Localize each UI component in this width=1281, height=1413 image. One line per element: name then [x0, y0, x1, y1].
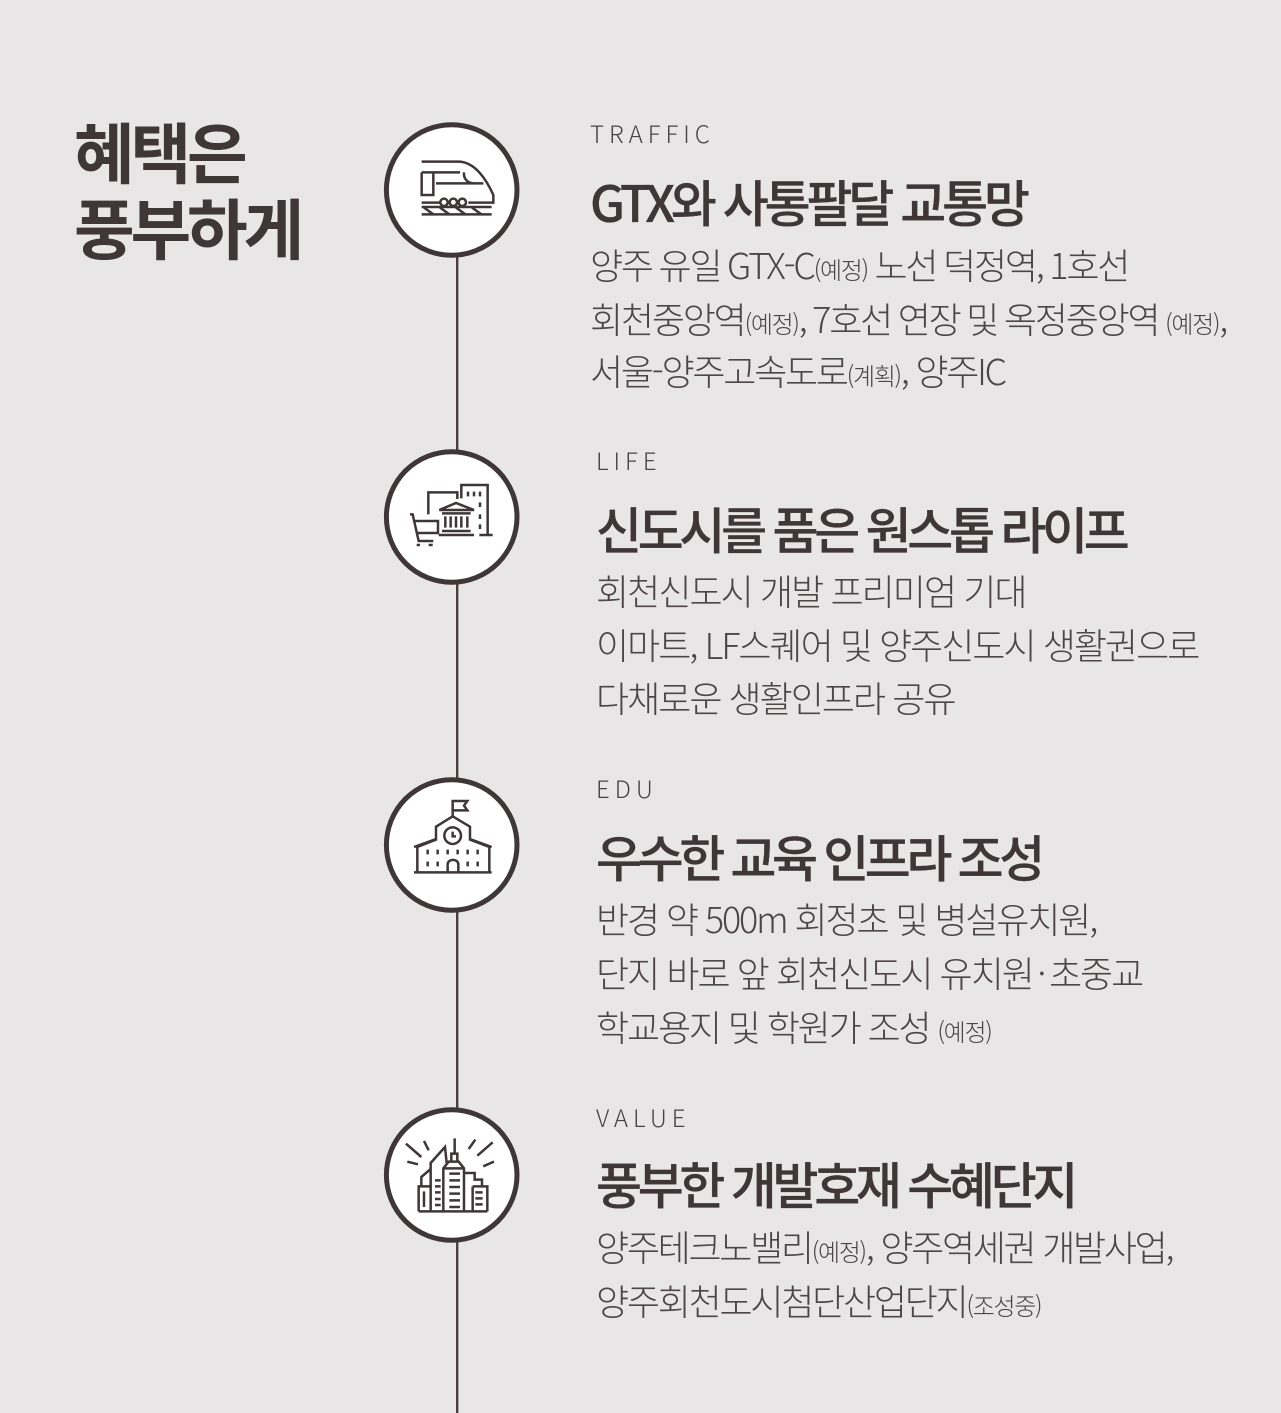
icon: school	[386, 780, 517, 910]
timeline line	[456, 250, 458, 1413]
heading: life: 신도시를 품은 원스톱 라이프	[596, 492, 1126, 564]
label: life: LIFE	[596, 442, 662, 477]
text: value line 1: 양주테크노밸리(예정), 양주역세권 개발사업,	[596, 1220, 1172, 1272]
text: traffic line 3: 서울-양주고속도로(계획), 양주IC	[590, 344, 1005, 396]
section: traffic	[590, 115, 1226, 396]
heading: edu: 우수한 교육 인프라 조성	[596, 820, 1041, 892]
section: life	[596, 442, 1198, 723]
text: value line 2: 양주회천도시첨단산업단지(조성중)	[596, 1274, 1041, 1326]
label: value: VALUE	[596, 1099, 691, 1134]
text: life line 3: 다채로운 생활인프라 공유	[596, 671, 954, 723]
text: edu line 3: 학교용지 및 학원가 조성 (예정)	[596, 1000, 991, 1052]
label: edu: EDU	[596, 770, 658, 805]
text: edu line 1: 반경 약 500m 회정초 및 병설유치원,	[596, 892, 1096, 944]
text: life line 1: 회천신도시 개발 프리미엄 기대	[596, 564, 1026, 616]
text: traffic line 2: 회천중앙역(예정), 7호선 연장 및 옥정중앙역 (예정),	[590, 292, 1226, 344]
text: traffic line 1: 양주 유일 GTX-C(예정) 노선 덕정역, 1호선	[590, 238, 1128, 290]
section: value	[596, 1099, 1172, 1326]
icon: shopping and buildings	[386, 452, 517, 582]
title: 혜택은 풍부하게	[74, 102, 300, 274]
icon: city	[386, 1110, 517, 1240]
icon: train	[386, 125, 517, 255]
text: edu line 2: 단지 바로 앞 회천신도시 유치원·초중교	[596, 946, 1142, 998]
label: traffic: TRAFFIC	[590, 115, 715, 150]
section: edu	[596, 770, 1142, 1052]
text: life line 2: 이마트, LF스퀘어 및 양주신도시 생활권으로	[596, 618, 1198, 670]
heading: value: 풍부한 개발호재 수혜단지	[596, 1147, 1074, 1219]
heading: traffic: GTX와 사통팔달 교통망	[590, 165, 1026, 237]
